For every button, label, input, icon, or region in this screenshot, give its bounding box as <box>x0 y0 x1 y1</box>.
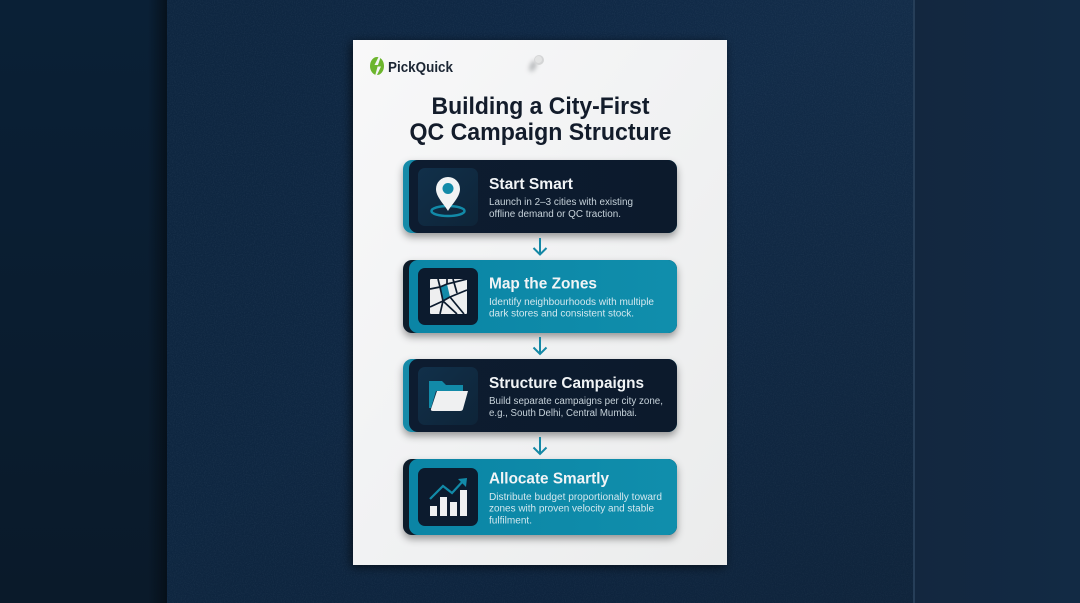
step 3: Structure Campaigns <box>403 359 677 432</box>
description: Build separate campaigns per city zone, <box>489 396 663 407</box>
description: Distribute budget proportionally toward <box>489 492 662 503</box>
step 4: Allocate Smartly <box>403 459 677 535</box>
description <box>489 297 654 320</box>
arrow: step 2 to step 3 <box>534 337 546 354</box>
description: Launch in 2–3 cities with existing <box>489 197 633 208</box>
title: Building a City-First <box>432 93 650 120</box>
description: zones with proven velocity and stable <box>489 504 654 514</box>
arrow: step 1 to step 2 <box>534 238 546 254</box>
description: dark stores and consistent stock. <box>489 308 634 320</box>
description: e.g., South Delhi, Central Mumbai. <box>489 408 637 419</box>
icon: rising bar chart <box>418 468 478 526</box>
title <box>410 93 672 146</box>
arrow: step 3 to step 4 <box>534 437 546 454</box>
icon: location pin <box>418 168 478 226</box>
icon: folder <box>418 367 478 425</box>
heading: Allocate Smartly <box>489 470 609 488</box>
description: fulfilment. <box>489 516 532 526</box>
panel: white poster <box>353 40 727 565</box>
description <box>489 492 662 526</box>
heading: Structure Campaigns <box>489 375 644 392</box>
description: Identify neighbourhoods with multiple <box>489 297 654 308</box>
heading: Map the Zones <box>489 276 597 292</box>
logo: PickQuick <box>370 56 454 76</box>
description <box>489 197 633 220</box>
brand name: PickQuick <box>388 60 454 76</box>
icon: push pin <box>528 55 544 73</box>
icon: green bolt logo mark <box>370 56 384 76</box>
icon: zone map <box>418 268 478 325</box>
description: offline demand or QC traction. <box>489 209 621 220</box>
description <box>489 396 663 419</box>
step 1: Start Smart <box>403 160 677 233</box>
heading: Start Smart <box>489 176 574 193</box>
step 2: Map the Zones <box>403 260 677 333</box>
title: QC Campaign Structure <box>410 119 672 146</box>
